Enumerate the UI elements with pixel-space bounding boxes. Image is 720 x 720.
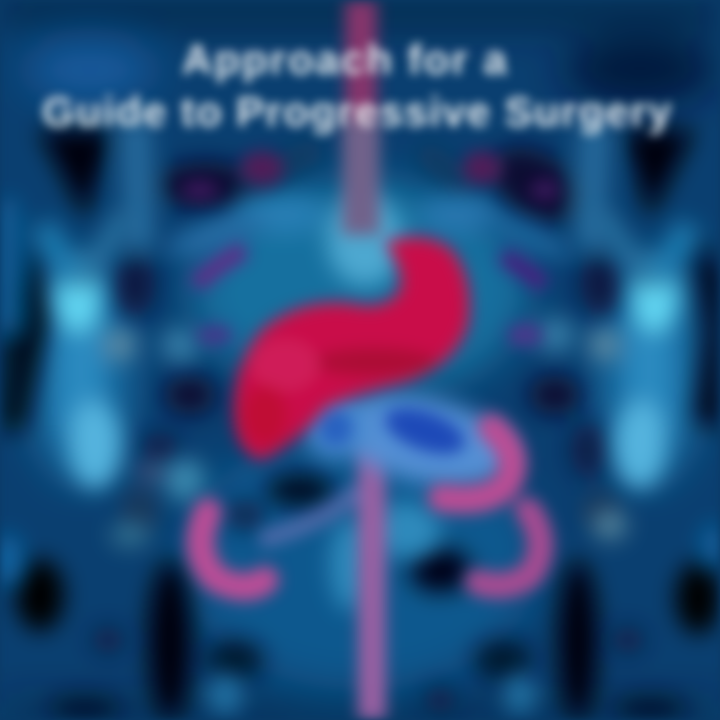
glow: side highlights <box>0 194 720 715</box>
organ: red stomach <box>234 237 470 460</box>
title: two-line heading <box>36 36 677 142</box>
highlights: magenta vessels <box>182 151 560 347</box>
organ: pink intestines <box>200 428 541 587</box>
organ: blue pancreas <box>303 380 524 500</box>
spine: central vessel <box>260 0 372 720</box>
organ: pancreas core <box>319 399 471 463</box>
title line 1: Approach for a <box>182 36 509 83</box>
title line 2: Guide to Progressive Surgery <box>42 88 673 135</box>
